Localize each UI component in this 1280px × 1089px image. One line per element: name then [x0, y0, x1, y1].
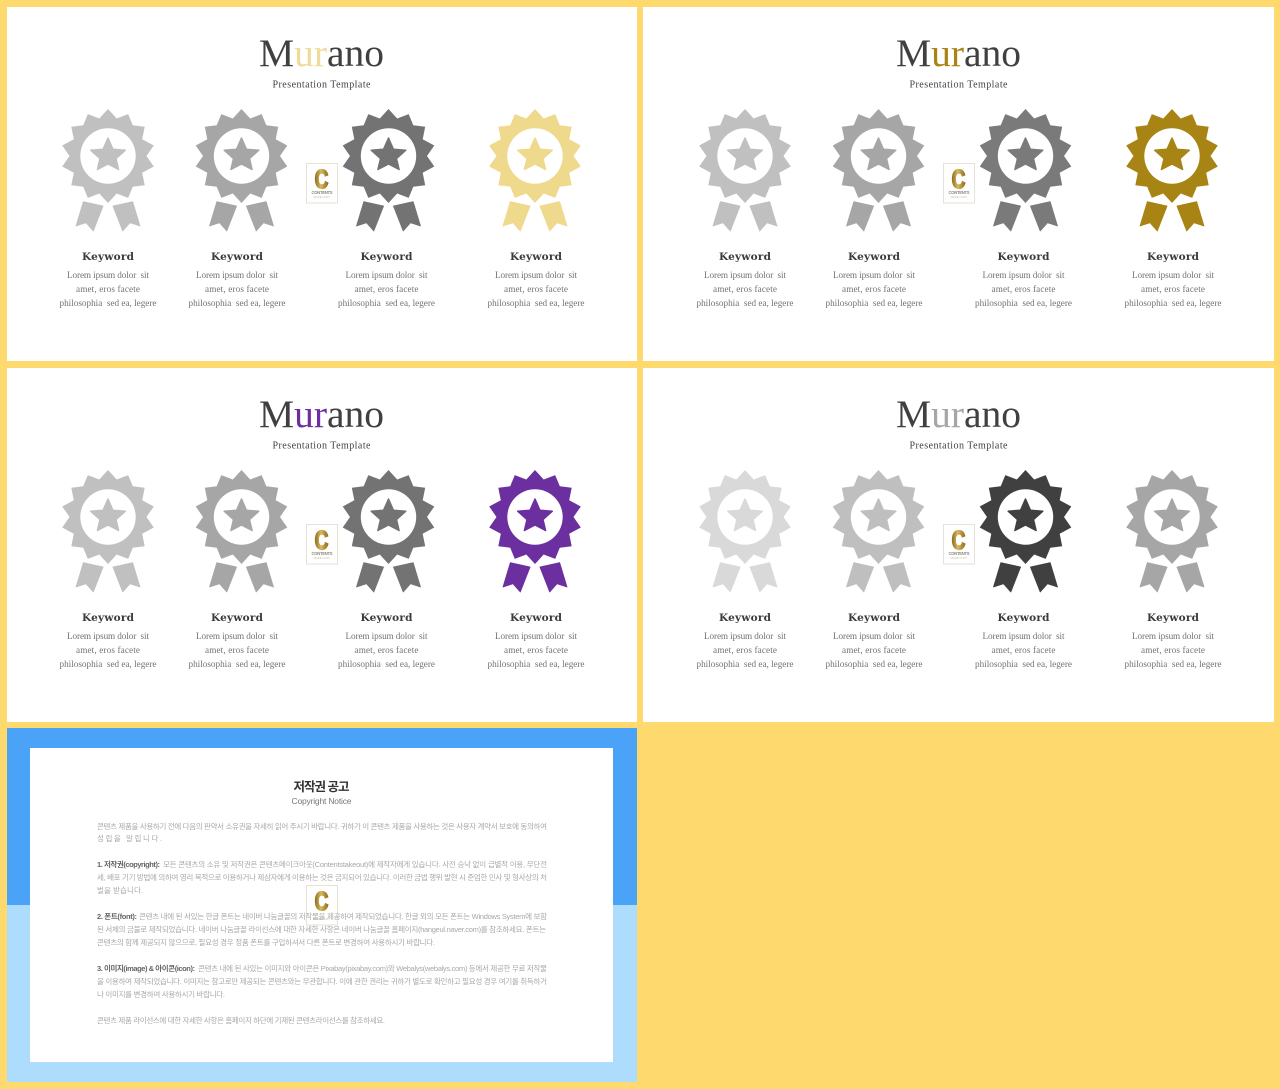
logo: MAKE COPY — [314, 195, 330, 199]
keyword column 3: philosophia sed ea, legere — [338, 298, 435, 308]
keyword column 1 — [60, 251, 156, 308]
notice section 2: 콘텐츠의 함께 제공되지 않으므로, 필요성 경우 정품 폰트를 구입하셔서 다른 폰트로 변경하여 사용하시기 바랍니다. — [97, 937, 435, 947]
keyword column 4: amet, eros facete — [1141, 284, 1205, 294]
title: Murano — [259, 31, 384, 75]
notice section 2 — [97, 911, 547, 947]
keyword column 1 — [696, 612, 794, 669]
keyword column 4: amet, eros facete — [504, 284, 568, 294]
keyword column 2: amet, eros facete — [842, 284, 906, 294]
title: Murano — [259, 392, 384, 436]
subtitle: Presentation Template — [910, 440, 1008, 452]
keyword column 3 — [975, 612, 1072, 669]
logo: MAKE COPY — [314, 917, 330, 921]
keyword column 1: amet, eros facete — [76, 645, 140, 655]
logo: C — [315, 525, 328, 555]
keyword column 4 — [488, 612, 584, 669]
keyword column 4: Lorem ipsum dolor sit — [495, 631, 577, 641]
icon: badge 3 — [980, 470, 1071, 592]
keyword column 2: Keyword — [848, 251, 901, 263]
icon: badge 1 — [62, 470, 154, 592]
keyword column 1: amet, eros facete — [713, 645, 777, 655]
keyword column 3 — [338, 612, 435, 669]
keyword column 2: philosophia sed ea, legere — [188, 659, 286, 669]
notice section 1: 벌을 받습니다. — [97, 885, 143, 895]
icon: badge 3 — [343, 109, 434, 231]
keyword column 3: Keyword — [998, 612, 1050, 624]
notice section 2: 2. 폰트(font): — [97, 912, 137, 921]
keyword column 2: Lorem ipsum dolor sit — [196, 270, 278, 280]
keyword column 2 — [188, 251, 286, 308]
title: Murano — [896, 31, 1021, 75]
logo: C — [315, 164, 328, 194]
notice intro — [97, 821, 547, 843]
logo: C — [952, 525, 965, 555]
icon: badge 1 — [62, 109, 154, 231]
keyword column 2: Keyword — [848, 612, 901, 624]
notice section 3 — [97, 963, 547, 999]
keyword column 2: Lorem ipsum dolor sit — [833, 270, 915, 280]
keyword column 2: Lorem ipsum dolor sit — [833, 631, 915, 641]
keyword column 2: amet, eros facete — [842, 645, 906, 655]
keyword column 4 — [1124, 251, 1222, 308]
logo: CONTENTS — [312, 190, 333, 195]
icon: badge 4 — [489, 470, 581, 592]
keyword column 2: philosophia sed ea, legere — [826, 659, 922, 669]
keyword column 1: amet, eros facete — [713, 284, 777, 294]
keyword column 4 — [1124, 612, 1222, 669]
logo — [306, 164, 338, 203]
notice section 3: 을 이용하여 제작되었습니다. 이미지는 참고로만 제공되는 콘텐츠와는 무관합니다. 이에 관한 권리는 귀하가 별도로 확인하고 필요성 경우 여기를 취득하거 — [97, 976, 547, 986]
keyword column 1: Keyword — [719, 612, 772, 624]
keyword column 1 — [696, 251, 794, 308]
keyword column 4 — [488, 251, 584, 308]
keyword column 1: Lorem ipsum dolor sit — [67, 270, 149, 280]
keyword column 1: Keyword — [719, 251, 772, 263]
keyword column 1: Lorem ipsum dolor sit — [704, 631, 786, 641]
keyword column 1: philosophia sed ea, legere — [60, 298, 156, 308]
icon: badge 4 — [489, 109, 581, 231]
logo: C — [315, 886, 328, 916]
subtitle: Presentation Template — [910, 80, 1008, 90]
icon: badge 2 — [833, 470, 924, 592]
keyword column 3 — [338, 251, 435, 308]
keyword column 2: amet, eros facete — [205, 645, 269, 655]
notice section 2: 된 서체의 금불로 제작되었습니다. 네이버 나눔글꼴 라이선스에 대한 자세한 사항은 네이버 나눔글꼴 홈페이지(hangeul.naver.com)를 참조하세요. 폰트는 — [97, 924, 546, 934]
keyword column 2 — [188, 612, 286, 669]
keyword column 2: Lorem ipsum dolor sit — [196, 631, 278, 641]
keyword column 3: amet, eros facete — [354, 284, 418, 294]
icon: badge 4 — [1126, 470, 1218, 592]
keyword column 4: amet, eros facete — [1141, 645, 1205, 655]
keyword column 2: amet, eros facete — [205, 284, 269, 294]
icon: badge 3 — [343, 470, 434, 592]
keyword column 4: Keyword — [510, 251, 563, 263]
keyword column 2 — [826, 612, 922, 669]
keyword column 3: Keyword — [360, 612, 413, 624]
logo: CONTENTS — [312, 551, 333, 556]
icon: badge 1 — [699, 109, 791, 231]
keyword column 3: philosophia sed ea, legere — [338, 659, 435, 669]
keyword column 1: philosophia sed ea, legere — [696, 298, 794, 308]
keyword column 4: amet, eros facete — [504, 645, 568, 655]
icon: badge 2 — [196, 109, 287, 231]
notice section 3: 3. 이미지(image) & 아이콘(icon): — [97, 963, 195, 973]
logo — [944, 524, 974, 564]
logo: CONTENTS — [948, 551, 970, 556]
notice section 1 — [97, 859, 547, 895]
notice section 2: 콘텐츠 내에 된 서있는 한글 폰트는 네이버 나눔글꼴의 저작물을 제공하여 제작되었습니다. 한글 외의 모든 폰트는 Windows System에 보함 — [139, 911, 547, 921]
logo — [944, 164, 974, 203]
logo: C — [952, 164, 965, 194]
notice section 3: 나 이미지를 변경하여 사용하시기 바랍니다. — [97, 989, 225, 999]
logo: CONTENTS — [948, 190, 970, 195]
keyword column 4: Keyword — [1147, 251, 1200, 263]
keyword column 1: Lorem ipsum dolor sit — [704, 270, 786, 280]
keyword column 1: philosophia sed ea, legere — [60, 659, 156, 669]
keyword column 3: Keyword — [998, 251, 1050, 263]
icon: badge 2 — [196, 470, 287, 592]
keyword column 4: Keyword — [510, 612, 563, 624]
panel: slide 3 purple accent — [7, 368, 637, 722]
keyword column 3: Lorem ipsum dolor sit — [982, 631, 1065, 641]
subtitle: Presentation Template — [272, 80, 371, 90]
icon: badge 1 — [699, 470, 791, 592]
title: Murano — [896, 392, 1021, 436]
icon: badge 2 — [833, 109, 924, 231]
keyword column 3: Lorem ipsum dolor sit — [346, 270, 428, 280]
keyword column 2: philosophia sed ea, legere — [188, 298, 286, 308]
notice intro: 콘텐츠 제품을 사용하기 전에 다음의 판약서 소유권을 자세히 읽어 주시기 바랍니다. 귀하가 이 콘텐츠 제품을 사용하는 것은 사용자 계약서 보호에 동의하여 — [97, 821, 547, 831]
keyword column 4: Lorem ipsum dolor sit — [495, 270, 577, 280]
keyword column 1: Keyword — [82, 612, 135, 624]
keyword column 1: Lorem ipsum dolor sit — [67, 631, 149, 641]
panel: slide 1 gold accent — [7, 7, 637, 361]
logo: MAKE COPY — [951, 195, 967, 199]
keyword column 3: philosophia sed ea, legere — [975, 298, 1072, 308]
notice intro: 성립을 알립니다. — [97, 834, 162, 843]
notice subheading: Copyright Notice — [292, 796, 352, 806]
panel: copyright notice — [7, 728, 637, 1082]
keyword column 3: amet, eros facete — [992, 284, 1056, 294]
keyword column 4: philosophia sed ea, legere — [488, 298, 584, 308]
logo: MAKE COPY — [951, 556, 967, 560]
keyword column 2: Keyword — [211, 251, 264, 263]
logo — [306, 886, 338, 925]
panel: slide 4 grey accent — [643, 368, 1274, 722]
keyword column 4: Lorem ipsum dolor sit — [1132, 270, 1214, 280]
panel: slide 2 dark gold accent — [643, 7, 1274, 361]
notice heading: 저작권 공고 — [294, 779, 350, 794]
keyword column 3 — [975, 251, 1072, 308]
notice section 1: 세, 배포 기기 방법에 의하여 영리 목적으로 이용하거나 제삼자에게 이용하는 것은 금지되어 있습니다. 이러한 금법 행위 발현 시 준엄한 민사 및 형사상의 처 — [97, 872, 547, 882]
keyword column 3: Lorem ipsum dolor sit — [982, 270, 1065, 280]
keyword column 4: philosophia sed ea, legere — [488, 659, 584, 669]
notice section 1: 모든 콘텐츠의 소유 및 저작권은 콘텐츠메이크아웃(Contentstakeout)에 제작자에게 있습니다. 사전 승낙 없이 급별적 이용, 무단전 — [163, 859, 547, 869]
keyword column 3: Lorem ipsum dolor sit — [346, 631, 428, 641]
keyword column 4: Lorem ipsum dolor sit — [1132, 631, 1214, 641]
keyword column 4: philosophia sed ea, legere — [1124, 298, 1222, 308]
keyword column 3: amet, eros facete — [992, 645, 1056, 655]
keyword column 4: philosophia sed ea, legere — [1124, 659, 1222, 669]
subtitle: Presentation Template — [272, 440, 371, 452]
keyword column 2: Keyword — [211, 612, 264, 624]
notice section 3: 콘텐츠 내에 된 사있는 이미지와 아이콘은 Pixabay(pixabay.com)와 Webalys(webalys.com) 등에서 제공한 무료 저작물 — [198, 963, 547, 973]
notice footer: 콘텐츠 제품 라이선스에 대한 자세한 사항은 홈페이지 하단에 기재된 콘텐츠라이선스를 참조하세요. — [97, 1015, 385, 1025]
keyword column 1: Keyword — [82, 251, 135, 263]
keyword column 3: philosophia sed ea, legere — [975, 659, 1072, 669]
keyword column 3: Keyword — [360, 251, 413, 263]
keyword column 2 — [826, 251, 922, 308]
notice section 1: 1. 저작권(copyright): — [97, 859, 160, 869]
logo — [306, 524, 338, 564]
keyword column 1: amet, eros facete — [76, 284, 140, 294]
icon: badge 3 — [980, 109, 1071, 231]
icon: badge 4 — [1126, 109, 1218, 231]
keyword column 2: philosophia sed ea, legere — [826, 298, 922, 308]
logo: MAKE COPY — [314, 556, 330, 560]
keyword column 4: Keyword — [1147, 612, 1200, 624]
keyword column 1 — [60, 612, 156, 669]
keyword column 1: philosophia sed ea, legere — [696, 659, 794, 669]
keyword column 3: amet, eros facete — [354, 645, 418, 655]
